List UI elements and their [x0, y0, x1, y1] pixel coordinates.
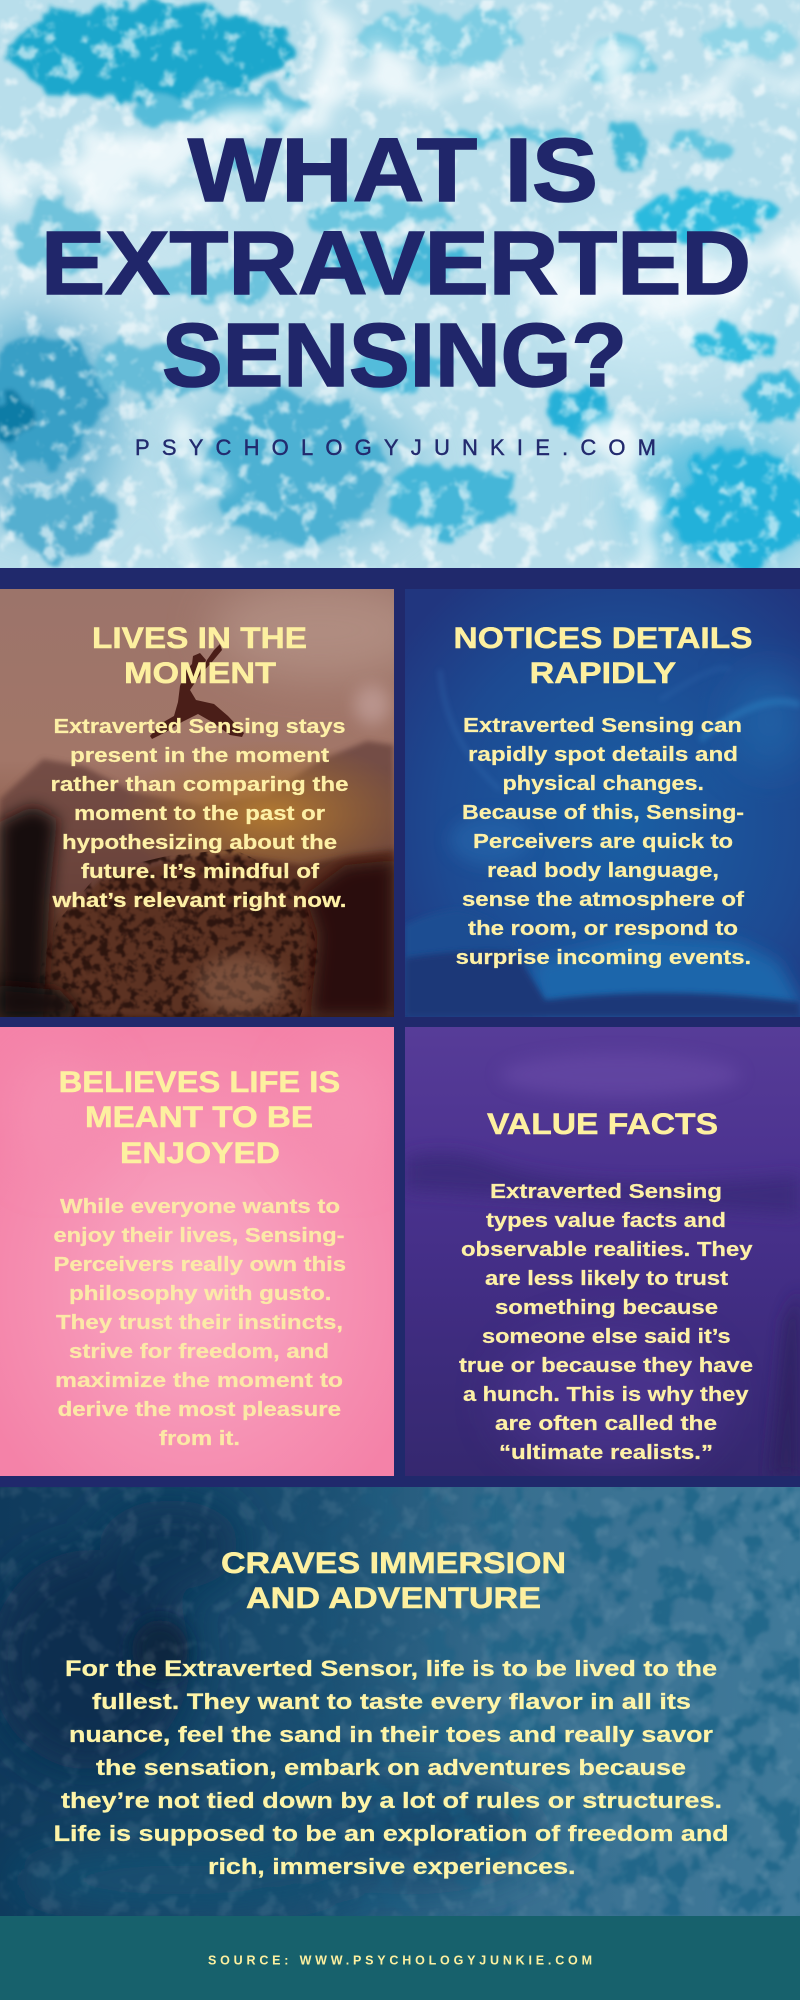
body text: enjoy their lives, Sensing- — [54, 1224, 344, 1247]
body text: present in the moment — [70, 744, 329, 767]
body text: rich, immersive experiences. — [208, 1854, 576, 1879]
heading: ENJOYED — [120, 1137, 280, 1170]
heading: NOTICES DETAILS — [454, 622, 752, 655]
body text: Perceivers are quick to — [473, 830, 733, 853]
body text: Life is supposed to be an exploration of freedom and — [54, 1821, 729, 1846]
title: What Is Extraverted Sensing?: SENSING? — [162, 306, 627, 406]
body text: rather than comparing the — [50, 773, 348, 796]
body text: are less likely to trust — [485, 1267, 728, 1290]
body text: Extraverted Sensing — [490, 1180, 722, 1203]
heading: BELIEVES LIFE IS — [59, 1066, 340, 1099]
subtitle: website: PSYCHOLOGYJUNKIE.COM — [135, 435, 656, 460]
icon: jumping silhouette — [150, 644, 244, 739]
heading: MEANT TO BE — [85, 1101, 313, 1134]
heading: LIVES IN THE — [92, 622, 307, 655]
body text: They trust their instincts, — [56, 1311, 343, 1334]
body text: from it. — [159, 1427, 240, 1450]
panel: value facts — [405, 1027, 800, 1476]
title: What Is Extraverted Sensing?: EXTRAVERTED — [41, 214, 751, 314]
heading: VALUE FACTS — [487, 1108, 718, 1141]
title: What Is Extraverted Sensing?: WHAT IS — [188, 121, 598, 221]
background: purple sea photo — [405, 1027, 800, 1476]
body text: While everyone wants to — [60, 1195, 340, 1218]
title: What Is Extraverted Sensing? — [41, 121, 751, 406]
heading: CRAVES IMMERSION — [221, 1547, 566, 1580]
body text: are often called the — [495, 1412, 717, 1435]
body text: Perceivers really own this — [54, 1253, 346, 1276]
body text: something because — [495, 1296, 718, 1319]
panel: lives in the moment — [0, 589, 394, 1017]
body text: what’s relevant right now. — [51, 889, 347, 912]
body text: rapidly spot details and — [468, 743, 738, 766]
body text: they’re not tied down by a lot of rules or structures. — [61, 1788, 722, 1813]
body text: hypothesizing about the — [62, 831, 337, 854]
body text: future. It’s mindful of — [81, 860, 319, 883]
heading — [454, 622, 752, 690]
panel: header with ocean background — [0, 0, 800, 568]
body text: sense the atmosphere of — [462, 888, 744, 911]
body text: someone else said it’s — [482, 1325, 731, 1348]
body text: maximize the moment to — [55, 1369, 343, 1392]
body text: the room, or respond to — [468, 917, 738, 940]
body text: strive for freedom, and — [69, 1340, 329, 1363]
body text: nuance, feel the sand in their toes and really savor — [69, 1722, 714, 1747]
body text — [50, 715, 348, 912]
body text: For the Extraverted Sensor, life is to be lived to the — [65, 1656, 717, 1681]
body text — [456, 714, 751, 969]
body text: “ultimate realists.” — [499, 1441, 713, 1464]
body text: true or because they have — [459, 1354, 753, 1377]
body text: a hunch. This is why they — [463, 1383, 749, 1406]
body text: moment to the past or — [74, 802, 325, 825]
body text: read body language, — [487, 859, 719, 882]
body text: the sensation, embark on adventures because — [96, 1755, 686, 1780]
background: blue book photo — [405, 589, 800, 1017]
heading — [59, 1066, 340, 1170]
body text: physical changes. — [502, 772, 704, 795]
heading — [92, 622, 307, 690]
heading: RAPIDLY — [530, 657, 676, 690]
body text: Extraverted Sensing stays — [54, 715, 346, 738]
body text: Because of this, Sensing- — [462, 801, 744, 824]
panel: notices details rapidly — [405, 589, 800, 1017]
heading — [221, 1547, 566, 1615]
source line: SOURCE: WWW.PSYCHOLOGYJUNKIE.COM — [208, 1954, 592, 1968]
heading: MOMENT — [124, 657, 276, 690]
body text: surprise incoming events. — [456, 946, 751, 969]
body text: fullest. They want to taste every flavor in all its — [92, 1689, 691, 1714]
body text: Extraverted Sensing can — [463, 714, 742, 737]
background: pink texture — [0, 1027, 394, 1476]
background: mountain and jumper photo — [0, 589, 394, 1017]
body text — [54, 1195, 346, 1450]
body text — [54, 1656, 729, 1879]
background: ocean foam — [0, 0, 800, 570]
panel: craves immersion and adventure — [0, 1487, 800, 1916]
panel: believes life is meant to be enjoyed — [0, 1027, 394, 1476]
background: dark ocean — [0, 1487, 800, 1916]
body text — [459, 1180, 753, 1464]
heading: AND ADVENTURE — [246, 1582, 541, 1615]
body text: observable realities. They — [461, 1238, 753, 1261]
body text: types value facts and — [486, 1209, 726, 1232]
body text: derive the most pleasure — [58, 1398, 341, 1421]
body text: philosophy with gusto. — [69, 1282, 332, 1305]
footer: source — [0, 1916, 800, 2000]
